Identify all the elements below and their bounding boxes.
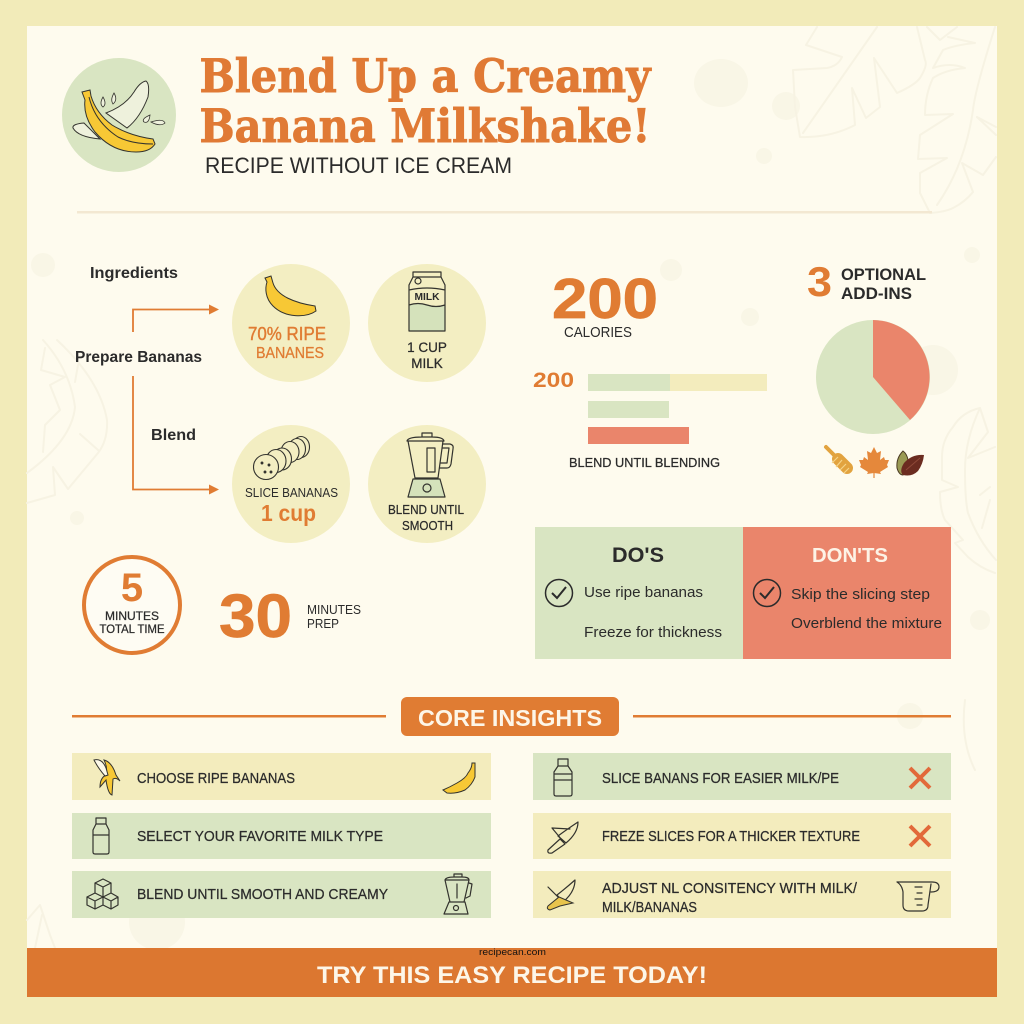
timer: total time: TOTAL TIME <box>100 622 164 636</box>
insight: blend until smooth: BLEND UNTIL SMOOTH AND CREAMY <box>137 886 388 903</box>
timer: total time: 5 <box>121 566 143 610</box>
icon: banana logo <box>62 58 176 172</box>
icon: knife <box>548 822 578 853</box>
icon: banana <box>265 276 316 316</box>
icon: maple leaf <box>859 447 889 478</box>
insight: freeze slices <box>533 813 951 859</box>
bar chart: 200 <box>533 369 574 392</box>
step: ripe bananas: 70% RIPE <box>248 324 326 344</box>
insight: choose ripe bananas <box>72 753 491 800</box>
step: slice bananas: SLICE BANANAS <box>245 486 338 500</box>
icon: banana slices <box>254 436 310 480</box>
icon: banana <box>443 763 475 793</box>
step: milk <box>368 264 486 382</box>
insight: select milk <box>72 813 491 859</box>
panel: don'ts: Overblend the mixture <box>791 615 942 632</box>
stat: prep minutes: MINUTES <box>307 603 361 617</box>
heading: prepare bananas: Prepare Bananas <box>75 349 202 366</box>
insight: slice bananas <box>533 753 951 800</box>
panel: recipe flow <box>75 264 486 543</box>
stat: calories: CALORIES <box>564 324 632 341</box>
step: ripe bananas: BANANES <box>256 345 324 362</box>
icon: check <box>546 580 572 606</box>
icon: bottle <box>554 759 572 796</box>
subtitle: RECIPE WITHOUT ICE CREAM <box>205 153 512 178</box>
insight: adjust consistency <box>533 871 951 918</box>
icon: blender <box>407 433 453 497</box>
stat: optional add-ins <box>807 258 926 305</box>
panel: don'ts: Skip the slicing step <box>791 586 930 603</box>
panel: do's <box>535 527 743 659</box>
stat: prep minutes: 30 <box>219 582 292 650</box>
section heading: core insights: CORE INSIGHTS <box>418 705 602 731</box>
step: ripe bananas <box>232 264 350 382</box>
footer banner: TRY THIS EASY RECIPE TODAY! <box>317 962 707 989</box>
stat: optional add-ins: 3 <box>807 258 832 305</box>
icon: cacao pods <box>897 451 924 476</box>
panel: don'ts: DON'TS <box>812 545 888 567</box>
stat: prep minutes: PREP <box>307 617 339 631</box>
icon: x mark <box>910 768 930 788</box>
watermark: recipecan.com <box>479 947 546 958</box>
icon: peeled banana <box>94 760 120 795</box>
panel: do's and don'ts <box>535 527 951 659</box>
panel: do's: Freeze for thickness <box>584 624 722 641</box>
stat: calories: 200 <box>552 267 658 331</box>
insight: blend until smooth <box>72 871 491 918</box>
footer banner <box>27 948 997 997</box>
icon: measuring cup <box>897 882 939 911</box>
title <box>200 49 652 153</box>
step: blend until smooth: BLEND UNTIL <box>388 502 464 517</box>
header divider <box>77 211 932 214</box>
title: Banana Milkshake! <box>200 99 650 153</box>
arrow: to ingredients <box>133 304 219 332</box>
heading: ingredients: Ingredients <box>90 265 178 282</box>
pie chart <box>816 320 930 434</box>
icon: milk carton: MILK <box>414 292 440 303</box>
arrow: to slicing <box>133 376 219 494</box>
header <box>62 49 652 178</box>
step: slice bananas: 1 cup <box>261 500 316 526</box>
panel: do's: DO'S <box>612 544 664 567</box>
insight: freeze slices: FREZE SLICES FOR A THICKER TEXTURE <box>602 829 860 845</box>
stat: prep minutes <box>219 582 361 650</box>
title: Blend Up a Creamy <box>200 49 652 103</box>
icon: blender <box>444 874 472 914</box>
insight: adjust consistency: ADJUST NL CONSITENCY WITH MILK/ <box>602 881 858 897</box>
icon: ice cubes <box>87 879 118 909</box>
insight: choose ripe bananas: CHOOSE RIPE BANANAS <box>137 771 295 787</box>
insight: slice bananas: SLICE BANANS FOR EASIER MILK/PE <box>602 771 839 787</box>
stat: optional add-ins: ADD-INS <box>841 285 912 303</box>
bar chart <box>533 369 767 470</box>
timer: total time: MINUTES <box>105 609 159 623</box>
icon: check <box>754 580 780 606</box>
icon: bottle <box>93 818 109 854</box>
icon: honey dipper <box>826 447 849 473</box>
insight: select milk: SELECT YOUR FAVORITE MILK TYPE <box>137 828 383 845</box>
step: milk: MILK <box>411 356 443 371</box>
section heading: core insights <box>72 697 951 736</box>
heading: blend: Blend <box>151 427 196 444</box>
panel: do's: Use ripe bananas <box>584 584 703 601</box>
stat: optional add-ins: OPTIONAL <box>841 266 926 284</box>
step: slice bananas <box>232 425 350 543</box>
insight: adjust consistency: MILK/BANANAS <box>602 900 697 916</box>
bar chart: BLEND UNTIL BLENDING <box>569 455 720 470</box>
step: blend until smooth: SMOOTH <box>402 518 453 533</box>
icon: knife and banana <box>547 880 575 910</box>
panel: don'ts <box>743 527 951 659</box>
step: blend until smooth <box>368 425 486 543</box>
step: milk: 1 CUP <box>407 340 447 355</box>
timer: total time <box>84 557 180 653</box>
icon: x mark <box>910 826 930 846</box>
